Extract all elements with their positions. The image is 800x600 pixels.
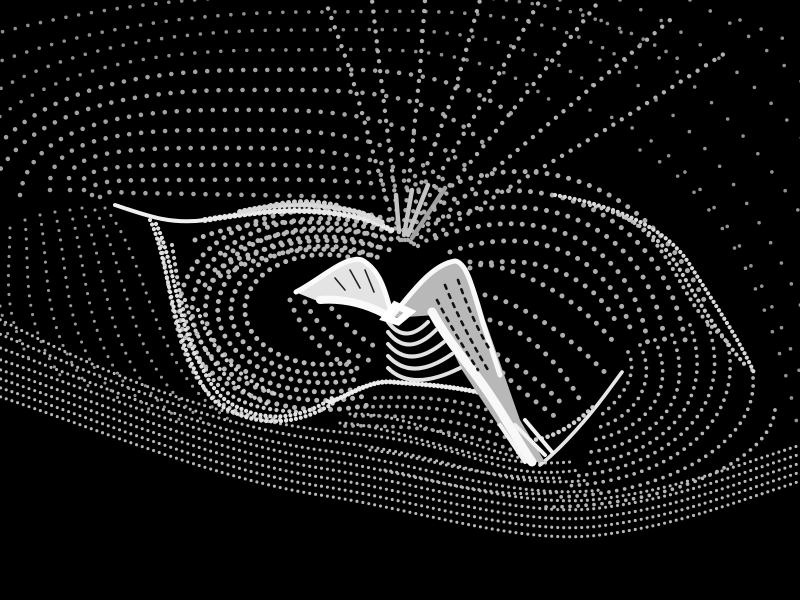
centre streak highlights — [396, 185, 445, 238]
top swirl rows — [0, 69, 520, 198]
centre left hump — [295, 259, 392, 318]
left lobe mesh arcs — [180, 210, 397, 410]
inner crescent dots — [290, 300, 382, 370]
lower connecting bright band — [330, 372, 622, 465]
radial streaks above centre — [325, 0, 730, 246]
upper top rows — [0, 0, 680, 125]
left lobe bright edge — [150, 220, 335, 421]
right side sparse dots — [560, 0, 800, 440]
right bright band — [555, 195, 755, 375]
centre right hump — [392, 260, 552, 462]
right lower arcs — [545, 325, 775, 507]
bottom mesh rows — [345, 397, 524, 455]
left lobe lower scatter — [160, 240, 300, 420]
right concentric dot arcs — [424, 172, 704, 422]
left dim dots — [0, 208, 230, 425]
centre U-shaped bands — [385, 305, 460, 380]
top bright band — [115, 202, 395, 232]
bottom flowing rows — [0, 317, 800, 537]
